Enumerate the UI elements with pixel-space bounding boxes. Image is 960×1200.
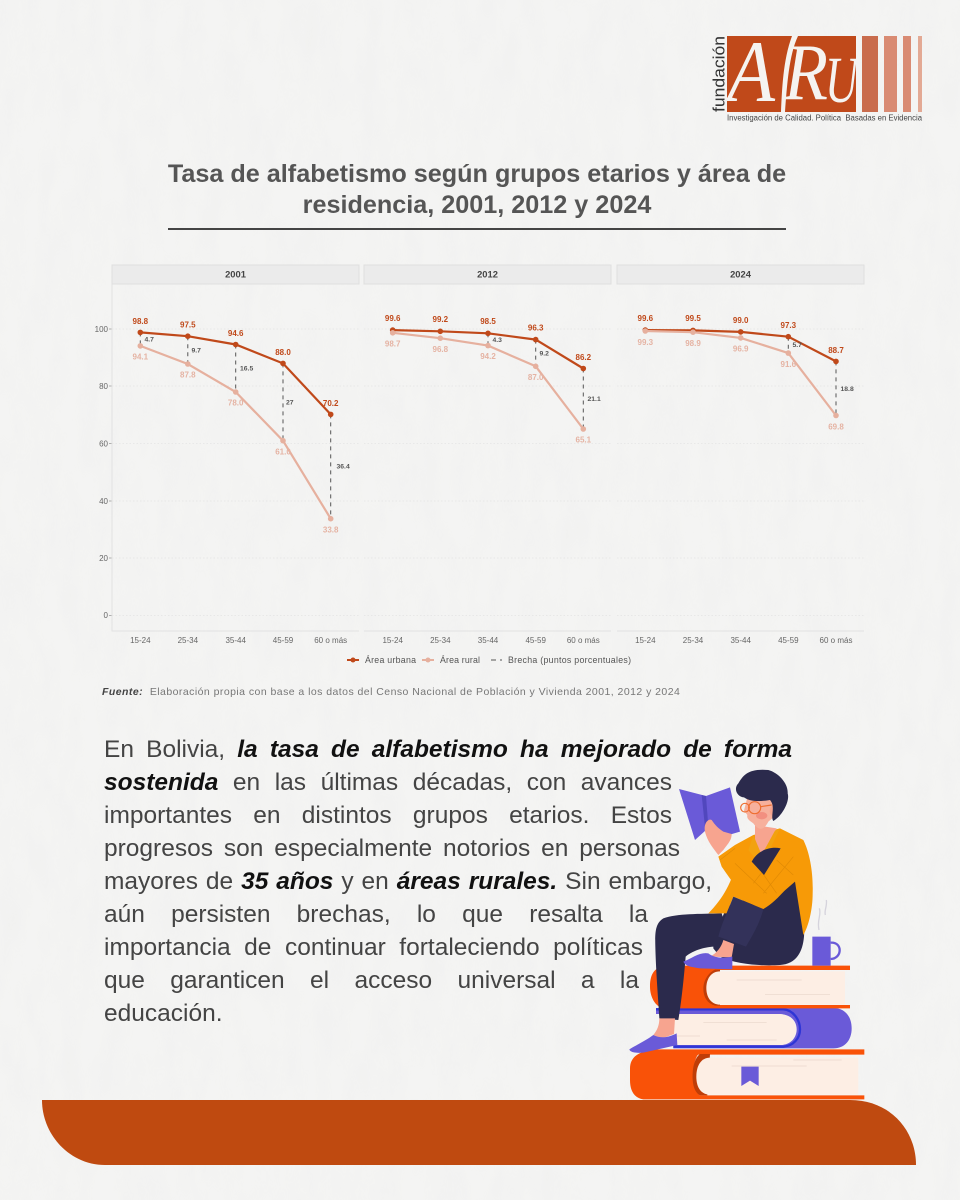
paragraph: importantes en distintos grupos etarios. Estos — [104, 802, 672, 829]
paragraph — [104, 736, 792, 1027]
back and seat — [713, 880, 804, 965]
values 2024: 5.7 — [792, 342, 802, 349]
y axis: 0 — [104, 611, 109, 620]
legend: Área rural — [440, 655, 480, 665]
values 2012: 21.1 — [588, 396, 601, 403]
sweater torso — [708, 828, 813, 935]
rural line 2001 — [138, 343, 334, 522]
panel header: 2024: 2024 — [730, 268, 752, 280]
x axis 2012 — [382, 636, 600, 645]
values 2024: 69.8 — [828, 422, 844, 432]
y axis: 80 — [99, 382, 109, 391]
x axis 2024: 45-59 — [778, 636, 799, 645]
values 2001: 78.0 — [228, 399, 244, 408]
logo stripes — [862, 36, 922, 112]
person: hair, head, body — [629, 770, 813, 1053]
legend — [347, 655, 631, 665]
values 2001: 88.0 — [275, 348, 291, 357]
sweater arm — [718, 845, 803, 909]
x axis 2001: 15-24 — [130, 636, 151, 645]
panel header: 2012 — [364, 265, 611, 284]
values 2001: 4.7 — [144, 336, 154, 344]
logo block: ARU: A — [723, 25, 776, 121]
values 2012: 99.6 — [385, 314, 401, 323]
x axis 2001 — [130, 636, 347, 645]
panel: 2001 — [112, 265, 359, 645]
values 2001: 94.1 — [133, 352, 149, 362]
bottom banner — [42, 1100, 916, 1165]
values 2024: 99.0 — [733, 316, 749, 325]
y axis — [95, 325, 112, 620]
y axis: 40 — [99, 497, 109, 506]
values 2024: 97.3 — [781, 321, 797, 330]
open book — [679, 787, 740, 840]
logo block: ARU: U — [825, 44, 861, 117]
values 2024: 99.3 — [638, 338, 654, 347]
x axis 2024: 25-34 — [683, 636, 704, 645]
panel: 2024 — [617, 265, 864, 645]
values 2012: 94.2 — [480, 352, 496, 361]
values 2024: 91.6 — [781, 360, 797, 369]
title — [168, 160, 786, 219]
values 2012: 65.1 — [576, 436, 592, 445]
x axis 2001: 25-34 — [178, 636, 199, 645]
ankle and shoe: lower foot — [653, 1018, 675, 1039]
values 2012 — [385, 314, 601, 445]
top book — [650, 966, 850, 1008]
x axis 2001: 35-44 — [225, 636, 246, 645]
values 2012: 9.2 — [540, 350, 549, 357]
rural line 2024 — [642, 328, 839, 418]
values 2001: 61.0 — [275, 447, 291, 456]
panel header: 2001: 2001 — [225, 268, 246, 280]
values 2001: 70.2 — [323, 399, 339, 408]
panel header: 2012: 2012 — [477, 268, 498, 280]
logo block: ARU — [727, 36, 856, 112]
ankle and shoe: raised foot — [710, 940, 734, 957]
values 2001: 98.8 — [133, 317, 149, 326]
gap lines 2012 — [488, 333, 583, 429]
values 2001: 9.7 — [192, 348, 201, 354]
logo block: ARU: R — [783, 29, 828, 117]
legs — [655, 913, 730, 1020]
paragraph: En Bolivia, la tasa de alfabetismo ha mejorado de forma — [104, 736, 792, 763]
title: Tasa de alfabetismo según grupos etarios y área de — [168, 160, 786, 188]
urban line 2001 — [138, 330, 334, 417]
x axis 2012: 25-34 — [430, 636, 451, 645]
paragraph: sostenida en las últimas décadas, con avances — [104, 769, 672, 796]
values 2001 — [133, 317, 350, 534]
urban line 2024 — [642, 327, 839, 364]
gap lines 2024 — [788, 337, 836, 416]
values 2012: 86.2 — [576, 353, 592, 362]
illustration: person reading on stack of books — [629, 770, 864, 1100]
values 2012: 4.3 — [492, 337, 502, 344]
values 2012: 99.2 — [433, 315, 449, 324]
values 2012: 96.8 — [433, 345, 449, 354]
legend: Área urbana — [365, 655, 416, 665]
source note: Fuente: Elaboración propia con base a los datos del Censo Nacional de Población y Vivienda 2001, 2012 y 2024 — [102, 686, 680, 698]
coffee mug — [812, 900, 840, 966]
values 2001: 87.8 — [180, 371, 196, 380]
x axis 2024 — [635, 636, 852, 645]
x axis 2012: 60 o más — [567, 636, 600, 645]
panel: 2012 — [364, 265, 611, 645]
paragraph: que garanticen el acceso universal a la — [104, 967, 639, 994]
x axis 2012: 45-59 — [525, 636, 546, 645]
middle book — [656, 1008, 852, 1048]
title: residencia, 2001, 2012 y 2024 — [303, 191, 651, 219]
paragraph: mayores de 35 años y en áreas rurales. Sin embargo, — [104, 868, 712, 895]
paragraph: aún persisten brechas, lo que resalta la — [104, 901, 648, 928]
neck — [755, 825, 777, 862]
logo tagline: Investigación de Calidad. Política Basadas en Evidencia — [727, 114, 923, 122]
dark knee — [752, 848, 781, 875]
chart: literacy rate by age group and area — [95, 264, 864, 665]
rural line 2012 — [390, 330, 586, 432]
x axis 2001: 45-59 — [273, 636, 294, 645]
values 2024: 98.9 — [685, 339, 701, 348]
bottom book — [630, 1049, 864, 1099]
y axis: 20 — [99, 554, 109, 563]
logo wordmark: fundación: fundación — [710, 36, 728, 112]
x axis 2012: 35-44 — [478, 636, 499, 645]
x axis 2024: 15-24 — [635, 636, 656, 645]
collar — [748, 828, 780, 867]
x axis 2024: 35-44 — [730, 636, 751, 645]
x axis 2012: 15-24 — [382, 636, 403, 645]
hand — [705, 820, 732, 855]
paragraph: educación. — [104, 1000, 223, 1027]
values 2001: 33.8 — [323, 525, 339, 534]
y axis: 60 — [99, 440, 109, 448]
face — [744, 793, 778, 829]
values 2024: 96.9 — [733, 344, 749, 354]
gap lines 2001 — [140, 332, 331, 519]
values 2001: 97.5 — [180, 321, 196, 330]
values 2012: 96.3 — [528, 323, 544, 332]
panel header: 2001 — [112, 265, 359, 284]
values 2012: 87.0 — [528, 373, 544, 382]
values 2001: 94.6 — [228, 329, 244, 338]
hair — [736, 770, 788, 821]
legend: Brecha (puntos porcentuales) — [508, 655, 631, 665]
x axis 2024: 60 o más — [820, 636, 852, 645]
values 2024: 88.7 — [828, 346, 844, 355]
glasses — [741, 802, 772, 814]
values 2001: 16.5 — [240, 366, 253, 372]
values 2024: 99.5 — [685, 314, 701, 323]
values 2012: 98.7 — [385, 340, 401, 348]
paragraph: importancia de continuar fortaleciendo políticas — [104, 934, 643, 961]
values 2024: 18.8 — [840, 386, 854, 393]
values 2001: 27 — [286, 400, 294, 406]
y axis: 100 — [95, 325, 109, 334]
urban line 2012 — [390, 327, 586, 371]
values 2012: 98.5 — [480, 317, 496, 326]
panel header: 2024 — [617, 265, 864, 284]
logo: fundación ARU — [710, 36, 923, 122]
x axis 2001: 60 o más — [314, 636, 347, 645]
values 2001: 36.4 — [336, 464, 350, 470]
values 2024: 99.6 — [638, 314, 654, 323]
paragraph: progresos son especialmente notorios en personas — [104, 835, 680, 862]
values 2024 — [638, 314, 854, 432]
